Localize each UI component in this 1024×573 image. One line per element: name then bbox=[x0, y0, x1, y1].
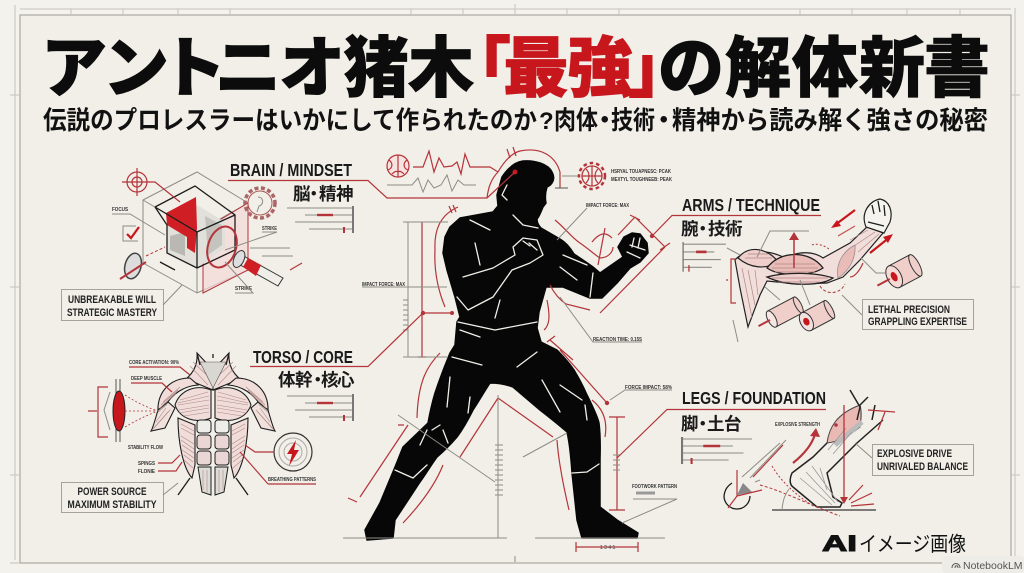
callout: unbreakable will bbox=[62, 285, 182, 320]
heading: brain / mindset: 脳・精神 bbox=[293, 184, 354, 204]
callout: explosive drive bbox=[855, 443, 974, 476]
icon: piston cylinder bbox=[231, 248, 302, 286]
mini chart bbox=[287, 394, 353, 421]
mini chart bbox=[287, 206, 353, 233]
body silhouette bbox=[365, 161, 648, 540]
heading: legs / foundation: LEGS / FOUNDATION bbox=[682, 388, 826, 408]
label: mental toughness bbox=[611, 169, 673, 183]
panel: brain waveform readout bbox=[387, 151, 673, 192]
muscle highlights bbox=[395, 185, 645, 478]
subtitle: ・ bbox=[592, 107, 618, 135]
figure labels: REACTION TIME: 0.15S bbox=[593, 337, 642, 343]
AI image note: AI bbox=[822, 531, 857, 556]
icon: calf and foot bbox=[772, 390, 895, 510]
icon: gear bbox=[245, 188, 275, 218]
callout: unbreakable will: STRATEGIC MASTERY bbox=[67, 307, 157, 319]
icon: ring with arrow bbox=[120, 247, 165, 281]
subtitle bbox=[43, 107, 988, 135]
waveform bbox=[413, 151, 498, 174]
callout: unbreakable will: UNBREAKABLE WILL bbox=[68, 294, 156, 306]
heading: arms / technique bbox=[652, 195, 821, 239]
label: mental toughness: HSRYAL TOUAPNESC: PCAK bbox=[611, 169, 672, 175]
heading: torso / core bbox=[250, 313, 452, 390]
figure labels: FOOTWORK PATTERN bbox=[632, 484, 677, 490]
label: explosive strength: EXPLOSIVE STRENGTH bbox=[775, 422, 820, 428]
heading: arms / technique: 腕・技術 bbox=[681, 219, 742, 239]
figure labels: FORCE IMPACT: 58% bbox=[625, 385, 672, 391]
AI image note: イメージ画像 bbox=[859, 533, 966, 556]
subtitle: 肉体 bbox=[554, 107, 598, 135]
foot dimension figure: 1 3 4 1 bbox=[600, 545, 616, 551]
panel: torso illustration bbox=[62, 353, 353, 512]
icon: muscled arm bbox=[727, 227, 883, 342]
panel: arm illustration bbox=[683, 199, 974, 342]
arrows and brackets bbox=[726, 210, 893, 315]
small labels: FOCUS bbox=[112, 207, 128, 213]
icon: muscle cylinders bbox=[754, 253, 925, 334]
heading: torso / core: TORSO / CORE bbox=[253, 347, 353, 367]
title: の解体新書 bbox=[658, 31, 990, 105]
panel: leg illustration bbox=[682, 390, 974, 516]
callout: explosive drive: UNRIVALED BALANCE bbox=[877, 461, 968, 473]
small labels: STRIKE bbox=[235, 286, 252, 292]
title: アントニオ猪木 bbox=[41, 31, 474, 105]
small labels: CORE ACTIVATION: 90% bbox=[129, 360, 179, 366]
icon: exploded cube bbox=[143, 172, 248, 293]
dimension lines around the figure bbox=[343, 147, 677, 562]
red target dot on head bbox=[512, 170, 518, 174]
NotebookLM badge: NotebookLM bbox=[963, 560, 1023, 572]
label: mental toughness: MEXTYL TOUGHNEEB: PEAK bbox=[611, 177, 673, 183]
heading: legs / foundation bbox=[617, 388, 826, 458]
subtitle: 伝説のプロレスラーはいかにして作られたのか bbox=[43, 107, 537, 135]
subtitle: ・ bbox=[651, 107, 677, 135]
small labels: SPINGS bbox=[138, 461, 155, 467]
mini chart bbox=[682, 437, 752, 464]
panel: brain illustration bbox=[62, 168, 353, 320]
NotebookLM badge bbox=[942, 556, 1024, 573]
callout: lethal precision bbox=[862, 300, 974, 330]
title: 「最強」 bbox=[445, 31, 694, 105]
AI image note bbox=[822, 531, 966, 556]
callout: lethal precision: LETHAL PRECISION bbox=[868, 304, 950, 316]
icon: brain bbox=[387, 155, 409, 177]
heading: brain / mindset bbox=[228, 160, 515, 204]
mini chart bbox=[683, 242, 726, 272]
subtitle: 技術 bbox=[611, 107, 655, 135]
icon: lightning target bbox=[245, 433, 312, 471]
small labels: STRIKE bbox=[262, 226, 277, 232]
icon: checkbox bbox=[123, 226, 139, 241]
icon: spindle muscle detail bbox=[88, 379, 158, 442]
heading: torso / core: 体幹・核心 bbox=[278, 370, 355, 390]
callout: lethal precision: GRAPPLING EXPERTISE bbox=[868, 316, 967, 328]
small labels: FLONIE bbox=[138, 469, 155, 475]
callout: power source: POWER SOURCE bbox=[78, 486, 146, 498]
callout: explosive drive: EXPLOSIVE DRIVE bbox=[877, 448, 952, 460]
small labels: STABILITY FLOW bbox=[128, 445, 164, 451]
callout: power source bbox=[62, 482, 178, 512]
icon: target eye bbox=[122, 168, 180, 202]
icon: fist bbox=[864, 199, 891, 233]
heading: brain / mindset: BRAIN / MINDSET bbox=[230, 160, 352, 180]
callout: power source: MAXIMUM STABILITY bbox=[68, 499, 157, 511]
small labels: DEEP MUSCLE bbox=[131, 376, 162, 382]
icon: ankle joint detail bbox=[724, 440, 786, 509]
small labels bbox=[128, 360, 316, 484]
arrows bbox=[760, 405, 874, 516]
subtitle: ? bbox=[539, 108, 554, 135]
figure labels bbox=[362, 203, 677, 490]
figure labels: IMPACT FORCE: MAX bbox=[586, 203, 629, 209]
small labels: BREATHING PATTERNS bbox=[268, 477, 316, 483]
icon: globe gear bbox=[579, 163, 605, 189]
small labels bbox=[112, 207, 277, 293]
subtitle: 精神から読み解く強さの秘密 bbox=[672, 107, 988, 135]
heading: legs / foundation: 脚・土台 bbox=[681, 414, 742, 434]
central fighter silhouette bbox=[365, 161, 648, 540]
figure labels: IMPACT FORCE: MAX bbox=[362, 282, 405, 288]
heading: arms / technique: ARMS / TECHNIQUE bbox=[682, 195, 820, 215]
icon: muscle torso bbox=[151, 353, 275, 495]
